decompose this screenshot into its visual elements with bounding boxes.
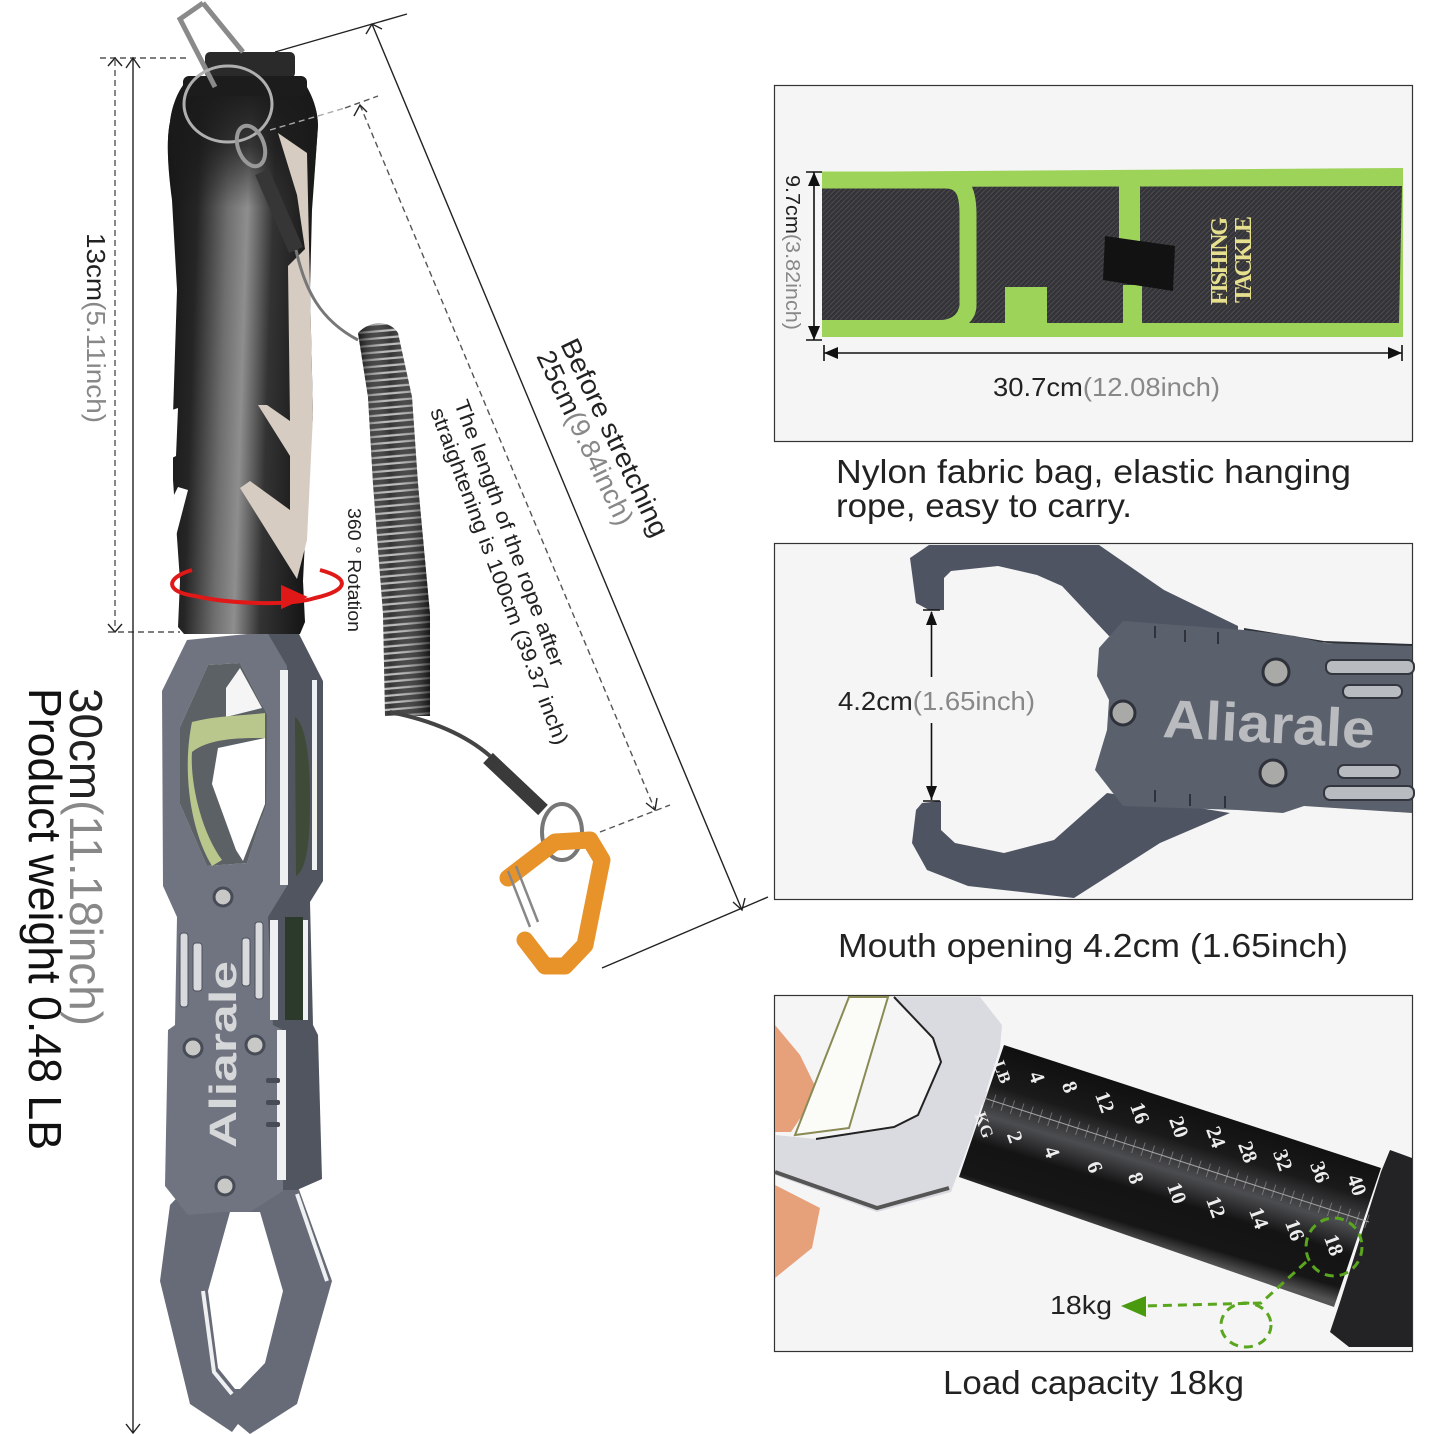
callout arrow [1121,1296,1146,1317]
brand: Aliarale [203,961,245,1148]
clip [180,3,243,87]
plate notches [1155,626,1225,808]
small ring [232,122,270,170]
opening label: 4.2cm(1.65inch) [838,686,1035,716]
scale numbers: 12 [1201,1193,1231,1221]
bag dimension lines [806,172,1402,361]
scale numbers: 40 [1342,1171,1372,1199]
jaws [160,1184,332,1434]
bag printed text: FISHING [1207,217,1233,305]
flap border [822,180,968,328]
text: 13cm dimension: 13cm (5.11inch) [81,233,111,423]
side plates [262,632,323,1190]
orange carabiner [508,840,602,966]
handle beige accent [240,133,313,579]
scale numbers: 18 [1319,1231,1349,1259]
text: rotation: 360 ° Rotation [344,508,364,632]
panel: load capacity [774,996,1412,1352]
scale numbers: 2 [1002,1128,1028,1146]
plate screws [1111,659,1289,786]
scale numbers: 12 [1090,1088,1120,1116]
split ring [184,66,272,142]
bag height label: 9.7cm (3.82inch) [781,175,803,330]
lower jaw [912,793,1230,898]
text: 30cm dimension: 30cm (11.18inch) [60,688,112,1026]
scale numbers: 24 [1201,1123,1231,1151]
rotation arrow [172,570,342,606]
front plate [162,632,287,1215]
pocket tab [1005,287,1047,323]
handle [168,84,318,634]
coiled rope [296,250,602,966]
scale tube [959,1045,1381,1307]
window inner frame [180,663,267,866]
tube end [1330,1150,1412,1347]
opening dimension [923,610,940,801]
scale numbers: 36 [1305,1158,1335,1186]
green callout [1144,1218,1362,1347]
upper jaw [910,545,1238,640]
cap [205,52,295,78]
scale ruler [984,1098,1369,1222]
gripper product photo [160,3,332,1434]
bag dark fabric [822,186,1402,323]
plate brand: Aliarale [1161,689,1376,760]
highlight strips [270,670,317,1180]
text: 25cm: 25cm(9.84inch) [531,346,639,530]
text: before stretching: Before stretching [555,334,675,542]
opening arrows [926,611,937,800]
panel: mouth opening [774,544,1414,900]
window opening upper [226,668,262,717]
metal head edge [775,1172,949,1208]
bag dimension arrows [808,172,1402,359]
text: product weight: Product weight 0.48 LB [19,688,71,1150]
scale numbers: LB [989,1058,1015,1086]
window opening lower [212,738,265,861]
scale numbers: 10 [1162,1179,1192,1207]
green band [188,713,265,866]
caption: mouth opening: Mouth opening 4.2cm (1.65inch) [838,927,1348,964]
handle top shade [168,84,318,290]
bag body [822,168,1403,337]
scale numbers: 16 [1280,1216,1310,1244]
crimp [262,172,296,250]
strap [1119,185,1142,323]
inner edge [816,997,941,1139]
fingers [775,1025,820,1278]
scale numbers [971,1058,1372,1259]
scale numbers: 16 [1125,1099,1155,1127]
caption: bag line 1: Nylon fabric bag, elastic hanging [836,453,1351,490]
scale numbers: 32 [1268,1146,1298,1174]
scale numbers: 4 [1024,1068,1050,1087]
metal head [775,997,1002,1212]
panel: bag [774,86,1412,442]
notches [266,1078,280,1127]
dimension lines [100,14,768,1433]
body slots [180,922,263,1007]
dashed tick over handle [270,108,345,130]
handle notches [172,408,188,540]
cap neck [183,76,307,96]
scale numbers: 20 [1164,1113,1194,1141]
jaw plate [1095,621,1412,813]
callout label: 18kg [1050,1290,1112,1320]
caption: bag line 2: rope, easy to carry. [836,487,1132,524]
text: rope length line 2: straightening is 100cm (39.37 inch) [425,405,572,748]
side slit 2 [285,917,303,1020]
bag width label: 30.7cm(12.08inch) [993,372,1220,402]
jaw highlights [203,1194,327,1394]
scale numbers: 14 [1244,1204,1274,1232]
side slit green [295,717,310,876]
velcro [1103,236,1175,291]
scale numbers: 8 [1123,1169,1149,1187]
body screws [184,888,264,1195]
scale numbers: 28 [1233,1138,1263,1166]
scale numbers: 6 [1082,1158,1108,1176]
white inner band [795,997,888,1135]
caption: load capacity: Load capacity 18kg [943,1364,1244,1401]
plate slots [1324,660,1414,800]
scale numbers: KG [971,1109,997,1141]
bag printed text 2: TACKLE [1231,216,1257,303]
carabiner gate [508,866,538,927]
dark back edge [1244,628,1412,650]
flap fill [822,189,959,320]
scale numbers: 8 [1057,1078,1083,1096]
text: rope length line 1: The length of the rope after [449,397,569,670]
scale numbers: 4 [1039,1143,1065,1162]
